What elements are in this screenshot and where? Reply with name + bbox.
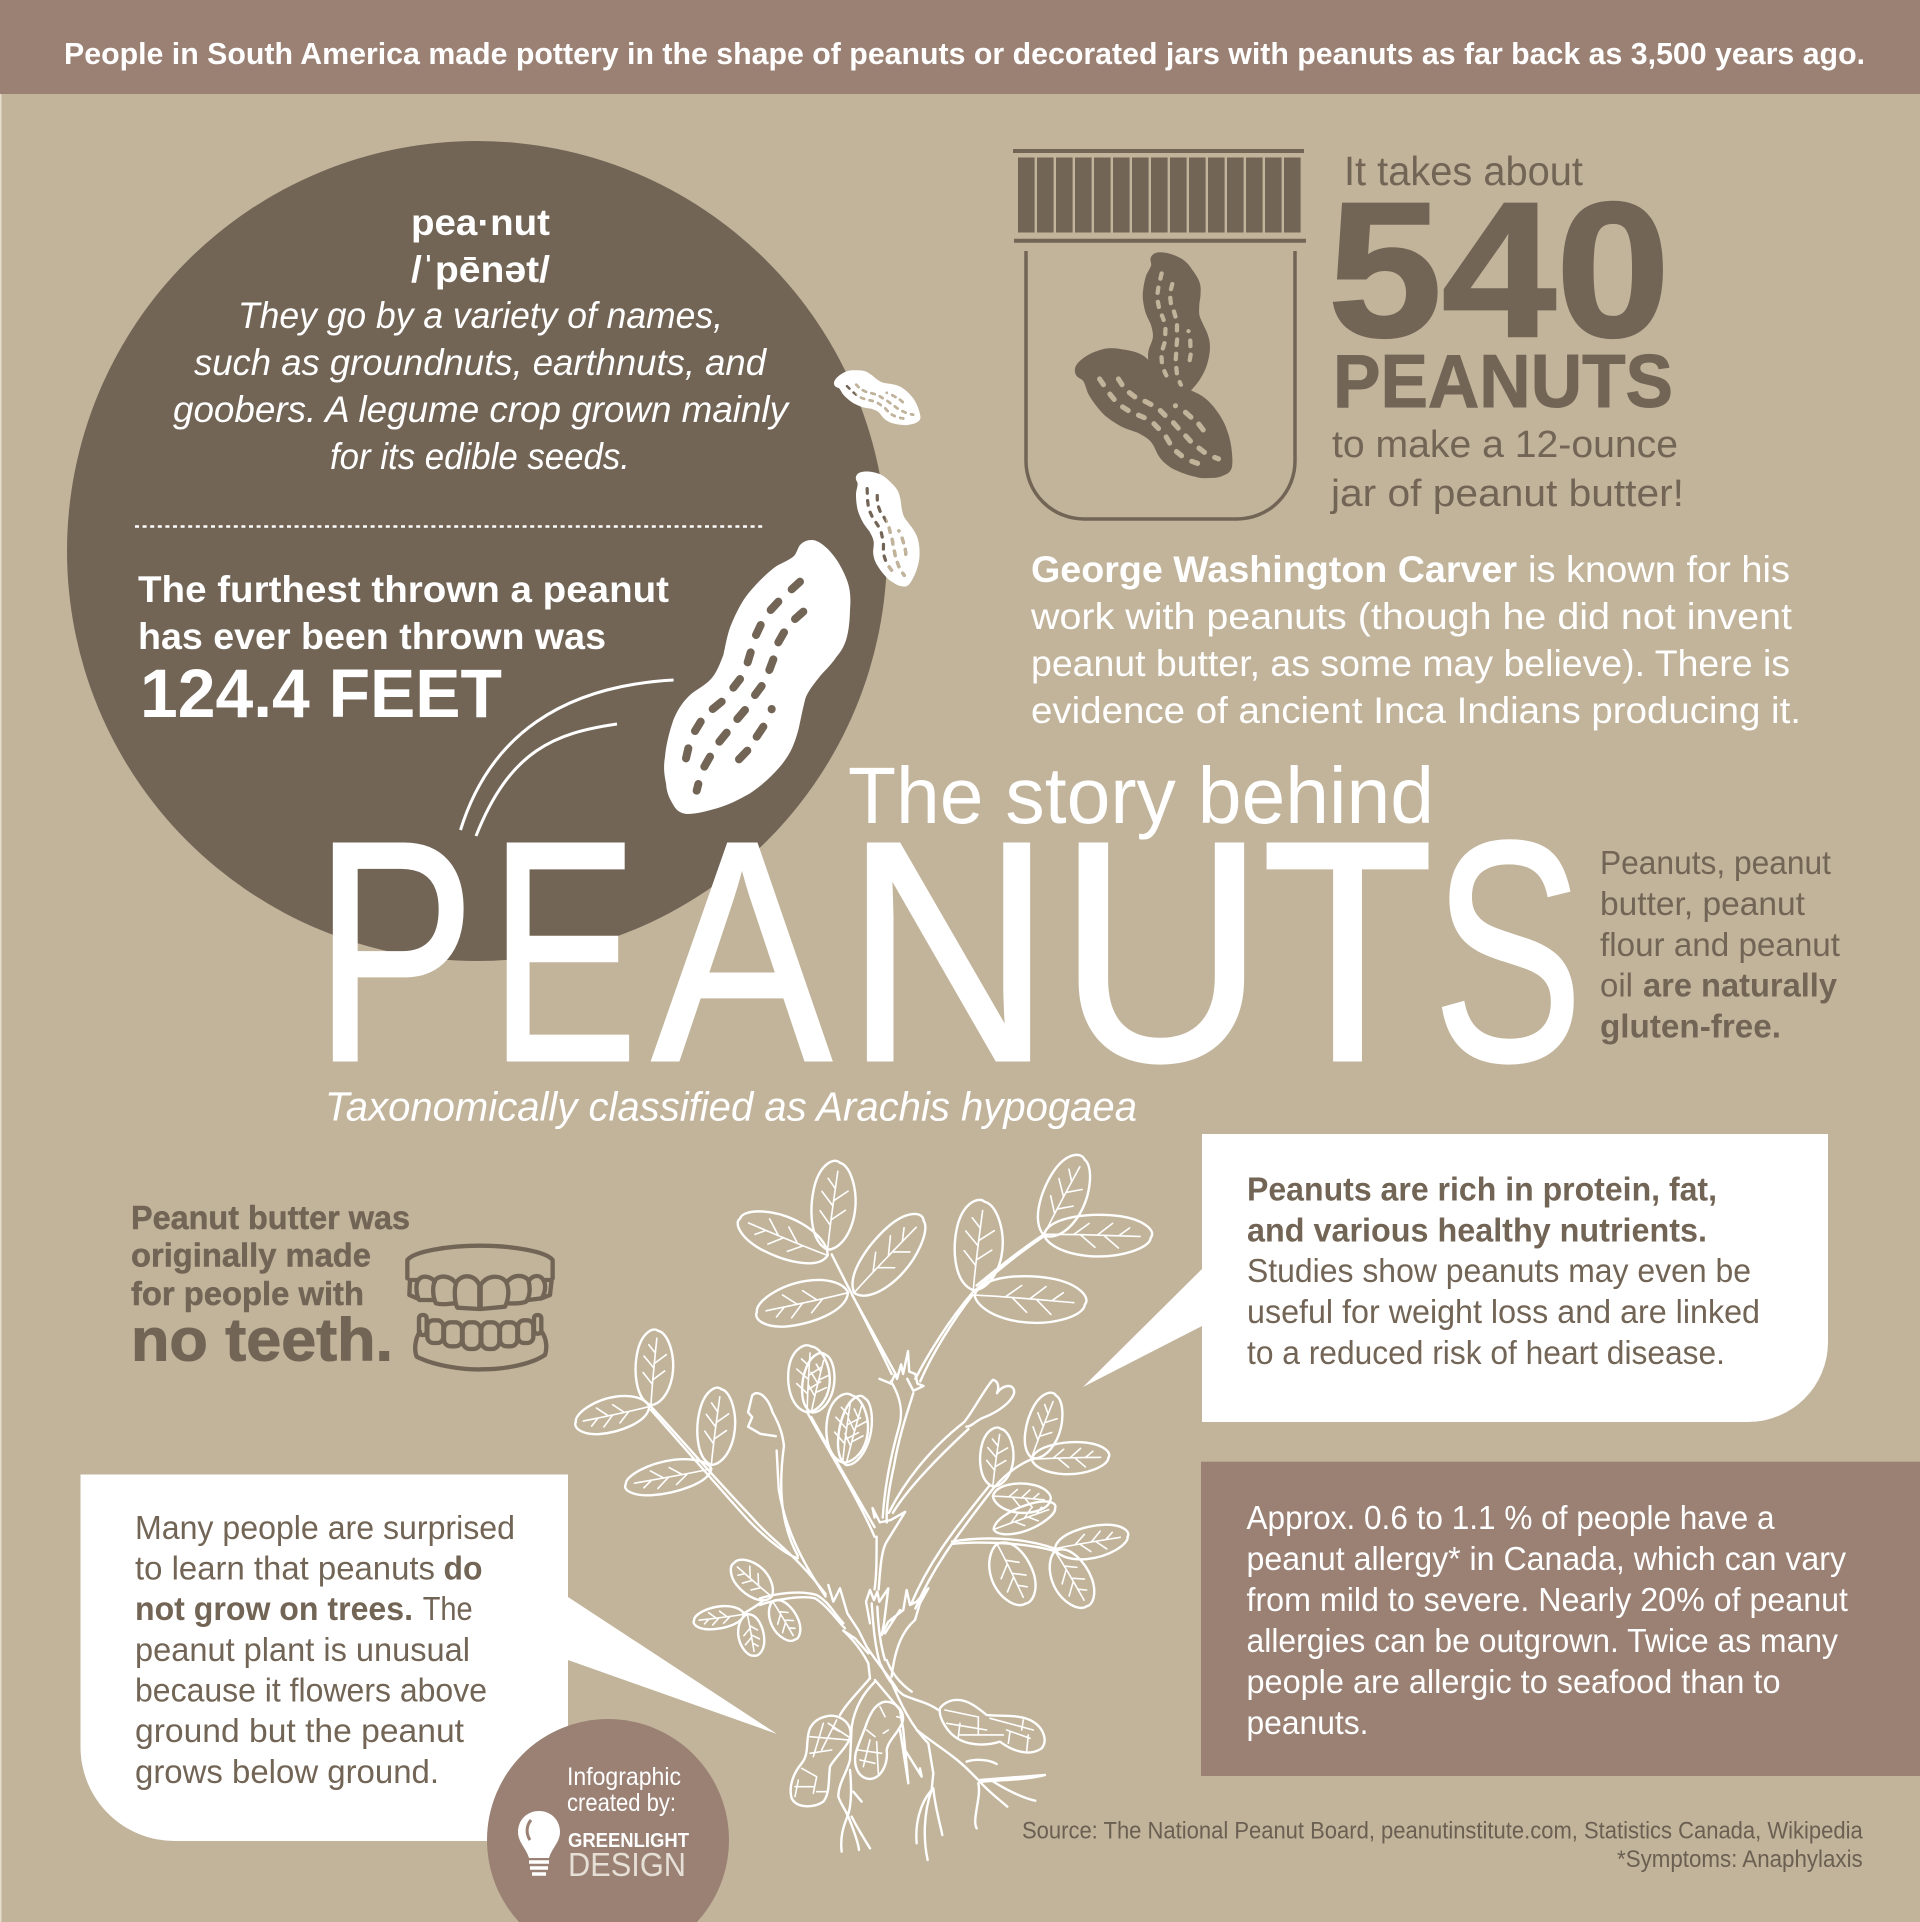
callout text: to a reduced risk of heart disease. [1247, 1334, 1725, 1371]
badge text: Infographic [567, 1763, 681, 1791]
title: The story behind [848, 751, 1434, 840]
stat: 540 peanuts: jar of peanut butter! [1330, 473, 1684, 515]
callout: nutrients [1083, 1134, 1828, 1422]
text block: George Washington Carver: evidence of ancient Inca Indians producing it. [1031, 690, 1801, 731]
source note [1022, 1818, 1863, 1873]
text block: George Washington Carver [1030, 549, 1801, 731]
callout text: and various healthy nutrients. [1247, 1212, 1707, 1249]
badge text: created by: [567, 1789, 676, 1817]
text block: gluten-free [1600, 844, 1840, 1044]
callout text: Peanuts are rich in protein, fat, [1247, 1170, 1717, 1207]
callout text: do [444, 1549, 482, 1586]
text block: no teeth: originally made [131, 1237, 371, 1274]
title [314, 751, 1583, 1130]
callout text: to learn that peanuts [135, 1549, 435, 1586]
title word: PEANUTS [314, 776, 1583, 1127]
definition word: /ˈpēnət/ [411, 249, 550, 290]
callout text: useful for weight loss and are linked [1247, 1293, 1760, 1330]
subtitle: Taxonomically classified as Arachis hypogaea [325, 1084, 1137, 1130]
definition text: They go by a variety of names, [238, 295, 723, 336]
title word: PEANUTS: T [1262, 776, 1434, 1127]
source note: Source: The National Peanut Board, peanutinstitute.com, Statistics Canada, Wikipedia [1022, 1818, 1863, 1845]
callout text [135, 1509, 515, 1790]
definition word [411, 202, 550, 290]
stat: 540 peanuts [1328, 148, 1684, 515]
definition text: goobers. A legume crop grown mainly [173, 389, 790, 430]
stat: 540 peanuts: 540 [1328, 162, 1670, 377]
peanut throw fact: has ever been thrown was [138, 616, 606, 657]
allergy text: from mild to severe. Nearly 20% of peanut [1246, 1581, 1848, 1618]
icon: big flying peanut [664, 540, 850, 814]
plant roots and peanuts [760, 1585, 1045, 1860]
definition text [173, 295, 790, 477]
text block: George Washington Carver: George Washington Carver [1031, 549, 1517, 590]
text block: gluten-free: gluten-free. [1600, 1007, 1781, 1044]
stat: 540 peanuts: PEANUTS [1333, 339, 1673, 423]
icon: small peanut one [834, 370, 920, 426]
text block: gluten-free: are naturally [1643, 967, 1838, 1004]
title word: PEANUTS: U [1058, 776, 1265, 1127]
panel: allergy box [1201, 1462, 1920, 1776]
callout text: Many people are surprised [135, 1509, 515, 1546]
definition word: pea·nut [411, 202, 550, 243]
illustration: peanut plant [572, 1145, 1153, 1860]
title word: PEANUTS: S [1433, 776, 1583, 1127]
title word: PEANUTS: N [845, 776, 1052, 1127]
callout text: not grow on trees. [135, 1590, 413, 1627]
peanut throw fact [138, 569, 669, 732]
icon: peanut butter jar [1013, 151, 1306, 519]
callout text: ground but the peanut [135, 1712, 464, 1749]
allergy text: peanuts. [1246, 1704, 1368, 1741]
text block: no teeth: no teeth. [131, 1307, 393, 1374]
text block: George Washington Carver: work with peanuts (though he did not invent [1030, 596, 1793, 637]
badge text: DESIGN [568, 1846, 686, 1883]
text block: gluten-free: butter, peanut [1600, 885, 1805, 922]
text block: George Washington Carver: peanut butter, as some may believe). There is [1031, 643, 1790, 684]
callout text: grows below ground. [135, 1753, 439, 1790]
allergy text [1246, 1499, 1848, 1741]
text block: George Washington Carver: is known for his [1528, 549, 1790, 590]
text block: gluten-free: Peanuts, peanut [1600, 844, 1831, 881]
allergy text: allergies can be outgrown. Twice as many [1246, 1622, 1838, 1659]
top banner [0, 0, 1920, 94]
callout text [1247, 1170, 1760, 1371]
title word: PEANUTS: P [314, 776, 475, 1127]
title word: PEANUTS: A [652, 776, 833, 1127]
motion arcs [460, 680, 674, 836]
badge text [567, 1763, 689, 1883]
icon: dentures [407, 1246, 553, 1369]
definition text: for its edible seeds. [330, 436, 630, 477]
callout: grows below ground [80, 1474, 777, 1841]
allergy text: people are allergic to seafood than to [1246, 1663, 1780, 1700]
badge: Greenlight Design [487, 1719, 729, 1922]
panel: definition circle [67, 141, 887, 961]
stat: 540 peanuts: It takes about [1344, 148, 1584, 194]
text block: no teeth [131, 1199, 410, 1374]
badge text: GREENLIGHT [568, 1830, 689, 1852]
text block: no teeth: Peanut butter was [131, 1199, 410, 1236]
source note: *Symptoms: Anaphylaxis [1617, 1846, 1863, 1873]
peanut throw fact: 124.4 FEET [140, 655, 502, 732]
text block: no teeth: for people with [131, 1275, 364, 1312]
callout text: The [423, 1590, 473, 1627]
allergy text: peanut allergy* in Canada, which can vary [1246, 1540, 1846, 1577]
text block: gluten-free: oil [1600, 967, 1633, 1004]
allergy text: Approx. 0.6 to 1.1 % of people have a [1246, 1499, 1775, 1536]
definition text: such as groundnuts, earthnuts, and [194, 342, 767, 383]
icon: small peanut two [856, 472, 920, 587]
callout text: because it flowers above [135, 1671, 487, 1708]
callout text: Studies show peanuts may even be [1247, 1252, 1751, 1289]
banner text: People in South America made pottery in the shape of peanuts or decorated jars with peanuts as far back as 3,500 years ago. [64, 36, 1865, 71]
stat: 540 peanuts: to make a 12-ounce [1332, 424, 1678, 466]
callout text: peanut plant is unusual [135, 1631, 470, 1668]
peanut throw fact: The furthest thrown a peanut [138, 569, 669, 610]
title word: PEANUTS: E [490, 776, 638, 1127]
text block: gluten-free: flour and peanut [1600, 926, 1840, 963]
icon: light bulb [518, 1811, 560, 1874]
